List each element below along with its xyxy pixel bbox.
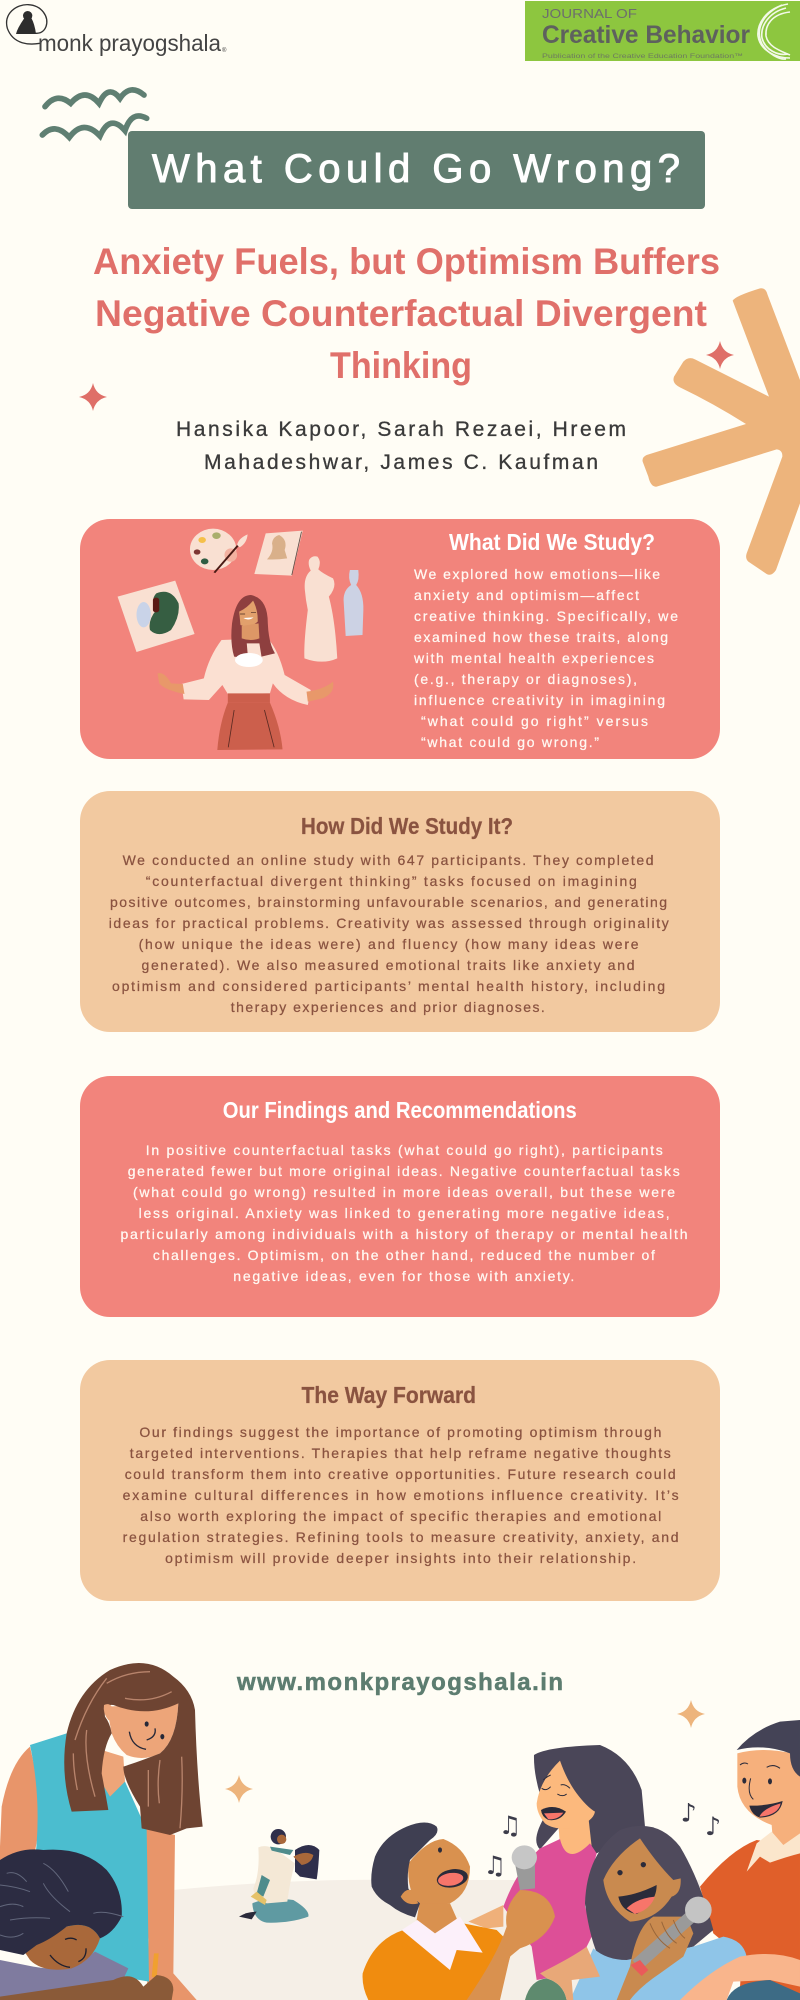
authors: Mahadeshwar, James C. Kaufman xyxy=(204,451,598,474)
logo wordmark: monk prayogshala xyxy=(38,30,221,56)
mother's face xyxy=(293,1853,313,1865)
icon: orange sparkle right xyxy=(677,1700,705,1728)
decorative squiggles xyxy=(42,90,147,137)
journal name large: Creative Behavior xyxy=(542,21,750,49)
illustration: woman juggling art xyxy=(118,529,363,750)
heading: Our Findings and Recommendations xyxy=(223,1097,577,1123)
child's hair curls xyxy=(0,1863,123,1937)
authors: Hansika Kapoor, Sarah Rezaei, Hreem xyxy=(176,418,626,441)
panel: the way forward xyxy=(80,1360,720,1601)
body text: positive outcomes, brainstorming unfavourable scenarios, and generating xyxy=(110,894,667,910)
title text: What Could Go Wrong? xyxy=(152,147,680,191)
authors xyxy=(176,418,626,474)
subtitle heading: Thinking xyxy=(330,345,472,386)
body text: examine cultural differences in how emotions influence creativity. It’s xyxy=(123,1487,679,1503)
journal tagline: Publication of the Creative Education Foundation™ xyxy=(542,53,743,60)
body text: optimism and considered participants’ mental health history, including xyxy=(112,978,665,994)
woman's eyes xyxy=(145,1721,164,1739)
arm behind orange man xyxy=(468,1905,503,1928)
body text: (what could go wrong) resulted in more ideas overall, but these were xyxy=(133,1184,675,1200)
icon: statue xyxy=(304,556,337,662)
arm of man in red xyxy=(680,1954,800,2000)
child's head xyxy=(271,1829,286,1844)
body text: “what could go right” versus xyxy=(421,713,648,729)
body text: We conducted an online study with 647 participants. They completed xyxy=(123,852,654,868)
mother's foot xyxy=(239,1912,257,1919)
icon: palette xyxy=(190,529,248,573)
body text xyxy=(123,1424,679,1566)
icon: journal swirl C xyxy=(758,4,790,59)
child's face xyxy=(23,1925,100,1970)
icon: seated monk in circle xyxy=(7,5,47,44)
icon: abstract canvas xyxy=(118,581,195,652)
woman's arms xyxy=(0,1747,197,2000)
logo: Journal of Creative Behavior xyxy=(525,1,800,61)
decorative orange burst xyxy=(642,288,800,575)
body text: examined how these traits, along xyxy=(414,629,668,645)
child's smile and eyes xyxy=(50,1938,86,1967)
hair highlights and face details xyxy=(73,1672,182,1828)
body text: (e.g., therapy or diagnoses), xyxy=(414,671,637,687)
subtitle heading: Negative Counterfactual Divergent xyxy=(95,293,707,334)
logo: monk prayogshala xyxy=(7,5,227,56)
body text: ideas for practical problems. Creativity was assessed through originality xyxy=(109,915,669,931)
icon: red sparkle right xyxy=(706,341,734,369)
music notes: ♫ xyxy=(499,1810,521,1840)
girl with microphone xyxy=(570,1826,747,2000)
woman's blue top xyxy=(30,1733,149,1982)
music notes xyxy=(483,1798,721,1880)
icon: red sparkle left xyxy=(79,383,107,411)
body text xyxy=(109,852,669,1015)
body text: (how unique the ideas were) and fluency (how many ideas were xyxy=(139,936,639,952)
website link: www.monkprayogshala.in xyxy=(236,1669,563,1696)
figure: woman xyxy=(158,595,333,750)
child's shoe xyxy=(251,1892,267,1905)
body text: particularly among individuals with a history of therapy or mental health xyxy=(120,1226,687,1242)
body text: also worth exploring the impact of specific therapies and emotional xyxy=(140,1508,661,1524)
icon: portrait card xyxy=(254,531,303,576)
body text: We explored how emotions—like xyxy=(414,566,660,582)
child's scarf and legs xyxy=(257,1847,293,1897)
body text: influence creativity in imagining xyxy=(414,692,665,708)
journal name small: JOURNAL OF xyxy=(542,6,637,21)
icon: blue vase xyxy=(344,570,363,636)
body text: “counterfactual divergent thinking” tasks focused on imagining xyxy=(146,873,637,889)
panel: what did we study xyxy=(80,519,720,759)
body text: could transform them into creative opportunities. Future research could xyxy=(125,1466,676,1482)
man in orange shirt xyxy=(363,1822,555,2000)
heading: What Did We Study? xyxy=(449,529,655,555)
body text: optimism will provide deeper insights into their relationship. xyxy=(165,1550,636,1566)
body text: Our findings suggest the importance of promoting optimism through xyxy=(139,1424,661,1440)
ground shape xyxy=(173,1880,700,2000)
mother's sweater xyxy=(253,1846,295,1903)
panel: our findings and recommendations xyxy=(80,1076,720,1317)
woman's hair xyxy=(64,1663,203,1835)
body text: with mental health experiences xyxy=(413,650,654,666)
heading: The Way Forward xyxy=(302,1382,476,1408)
hand of woman in pink xyxy=(540,1947,600,2000)
body text: In positive counterfactual tasks (what could go right), participants xyxy=(146,1142,663,1158)
subtitle heading xyxy=(93,241,720,386)
body text: anxiety and optimism—affect xyxy=(414,587,639,603)
body text xyxy=(120,1142,687,1284)
illustration: teacher and child xyxy=(0,1663,203,2000)
body text: “what could go wrong.” xyxy=(421,734,599,750)
body text: challenges. Optimism, on the other hand, reduced the number of xyxy=(153,1247,655,1263)
mother's hair xyxy=(295,1845,319,1879)
music notes: ♪ xyxy=(681,1798,697,1828)
child's arm and hand xyxy=(0,1975,173,2000)
child's hair xyxy=(0,1849,122,1955)
body text: less original. Anxiety was linked to generating more negative ideas, xyxy=(139,1205,670,1221)
woman's ear xyxy=(104,1704,113,1720)
body text: generated). We also measured emotional traits like anxiety and xyxy=(142,957,634,973)
body text: regulation strategies. Refining tools to measure creativity, anxiety, and xyxy=(123,1529,679,1545)
illustration: group singing xyxy=(363,1720,800,2000)
mother's jeans xyxy=(252,1899,308,1923)
body text: targeted interventions. Therapies that help reframe negative thoughts xyxy=(130,1445,671,1461)
body text: generated fewer but more original ideas. Negative counterfactual tasks xyxy=(128,1163,680,1179)
title banner xyxy=(128,131,705,209)
jeans of man in red xyxy=(727,1980,800,2000)
music notes: ♪ xyxy=(705,1811,721,1841)
woman's neck and face xyxy=(100,1703,178,1797)
body text: therapy experiences and prior diagnoses. xyxy=(231,999,545,1015)
woman in pink xyxy=(503,1745,645,1980)
music notes: ♫ xyxy=(483,1850,506,1880)
child's shirt xyxy=(0,1952,128,1998)
subtitle heading: Anxiety Fuels, but Optimism Buffers xyxy=(93,241,720,282)
illustration: mother carrying child xyxy=(239,1829,319,1923)
body text: negative ideas, even for those with anxiety. xyxy=(233,1268,574,1284)
pencil xyxy=(152,1953,159,1978)
green object xyxy=(525,1978,567,2000)
panel: how did we study it xyxy=(80,791,720,1032)
body text: creative thinking. Specifically, we xyxy=(414,608,678,624)
icon: orange sparkle left xyxy=(225,1775,253,1803)
man in red shirt xyxy=(700,1720,800,2000)
body text xyxy=(413,566,678,750)
heading: How Did We Study It? xyxy=(301,813,513,839)
registered mark: ® xyxy=(222,47,227,54)
